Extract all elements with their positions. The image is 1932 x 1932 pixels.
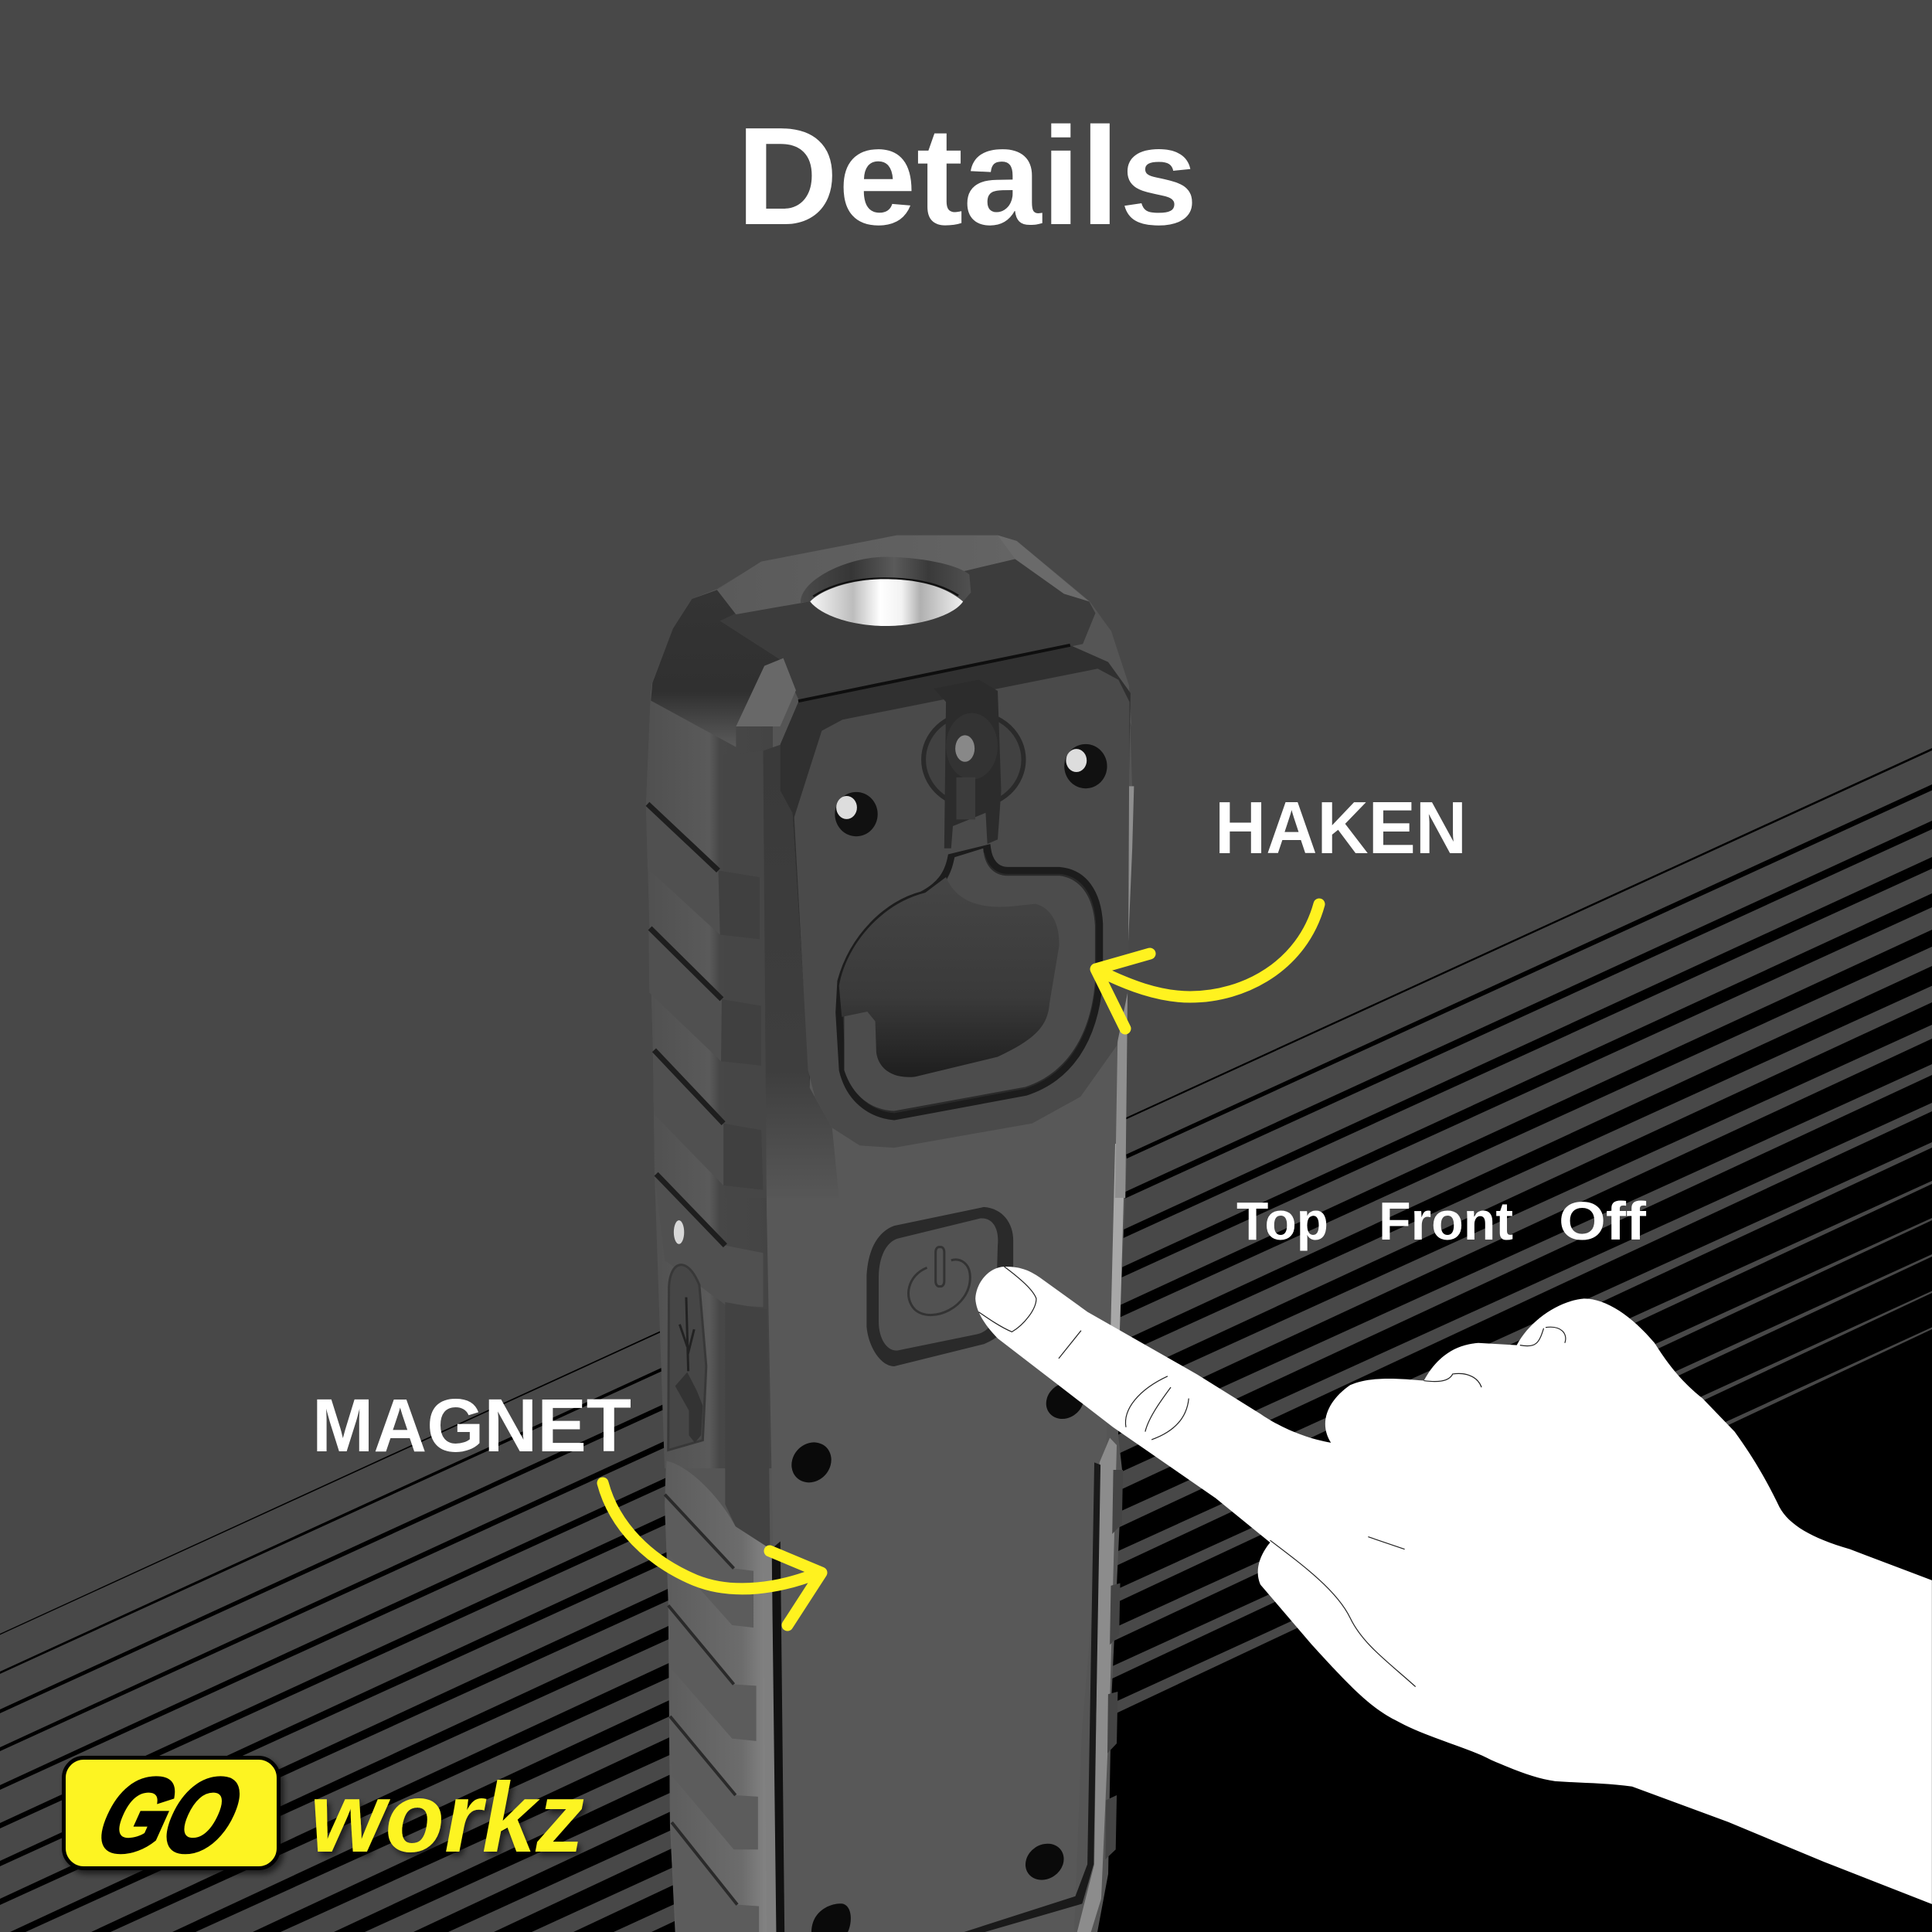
- grip rib 3: [653, 1050, 763, 1190]
- right edge highlight: [1110, 1144, 1125, 1368]
- logo: GO workz: [63, 1757, 584, 1873]
- left groove light edge: [763, 1549, 776, 1932]
- rib face: [648, 928, 761, 1066]
- rib 4 edge: [656, 1174, 725, 1246]
- left dark groove: [772, 1541, 784, 1932]
- lower grip rib 3: [670, 1716, 758, 1849]
- screw left: [835, 792, 878, 836]
- side dark column: [723, 750, 767, 1198]
- rib face: [670, 1716, 758, 1849]
- word: Top: Top: [1236, 1191, 1328, 1251]
- finger crease: [1059, 1331, 1081, 1359]
- hook opening: [839, 877, 1060, 1077]
- button recess: [866, 1207, 1013, 1366]
- lower grip rib 4: [672, 1822, 759, 1932]
- grip rib 1: [646, 804, 760, 939]
- button face: [879, 1218, 998, 1351]
- lower grip rib 1: [665, 1495, 753, 1628]
- knuckle crease 2: [1145, 1387, 1171, 1432]
- side mid column: [725, 1302, 770, 1549]
- right side bump 4: [1105, 1795, 1117, 1859]
- screw glint: [1066, 749, 1087, 772]
- knuckle crease 1: [1125, 1376, 1168, 1427]
- curled finger line 2: [1546, 1327, 1566, 1343]
- grip rib 2: [648, 928, 761, 1066]
- right corner: [1083, 601, 1131, 726]
- rib edge: [650, 928, 722, 999]
- rib front: [718, 870, 760, 939]
- rib face: [668, 1605, 757, 1741]
- rib front: [721, 999, 761, 1066]
- hook outer groove: [839, 849, 1100, 1117]
- USB symbol: [679, 1298, 694, 1371]
- right bevel: [998, 536, 1089, 601]
- rib edge: [665, 1495, 734, 1569]
- lens: [801, 557, 971, 626]
- right side bump 1: [1112, 1470, 1123, 1534]
- hand illustration: [975, 1267, 1932, 1904]
- arrow: HAKEN: [1096, 904, 1319, 1029]
- device body silhouette: [646, 536, 1132, 1932]
- ball: [946, 713, 998, 780]
- top front band: [720, 559, 1096, 701]
- right side bump 3: [1107, 1692, 1117, 1753]
- curled finger line 3: [1423, 1373, 1481, 1387]
- diagonal stripes background: [0, 748, 1932, 1932]
- rib front: [723, 1124, 763, 1190]
- rib edge: [672, 1822, 737, 1905]
- USB trident: [679, 1298, 694, 1371]
- right edge strip: [1115, 786, 1134, 1198]
- screw right: [1064, 744, 1107, 788]
- label: HAKEN: HAKEN: [1215, 787, 1467, 869]
- right dark groove: [963, 1462, 1100, 1932]
- rib edge: [668, 1605, 734, 1684]
- left shoulder: [651, 590, 781, 747]
- logo word workz: workz: [310, 1763, 584, 1873]
- ball stem: [956, 777, 975, 819]
- arrow curve: [603, 1483, 819, 1589]
- screw hole upper left: [789, 1438, 834, 1487]
- arrow head: [1096, 954, 1150, 1029]
- power ring: [908, 1260, 970, 1315]
- lower grip rib 2: [668, 1605, 757, 1741]
- lower left side: [665, 1461, 774, 1932]
- hand contour lines: [978, 1267, 1566, 1687]
- top of the device: [651, 536, 1131, 747]
- logo word GO: GO: [80, 1757, 261, 1873]
- screw hole upper right: [1044, 1379, 1086, 1423]
- power bar: [936, 1247, 944, 1287]
- recess top line: [798, 645, 1070, 701]
- word: Front: Front: [1379, 1191, 1513, 1251]
- screw hole lower right: [1023, 1839, 1066, 1884]
- title: Details: [736, 99, 1198, 254]
- rib edge: [654, 1050, 723, 1124]
- LED indicator: [674, 1220, 684, 1244]
- screw hole: [835, 792, 878, 836]
- rib face: [646, 804, 760, 939]
- lens bezel: [801, 557, 971, 603]
- right panel border light: [1077, 1437, 1117, 1932]
- rear top surface: [717, 536, 1017, 614]
- fingernail: [978, 1267, 1036, 1332]
- lens reflector: [810, 579, 963, 626]
- rib edge: [670, 1716, 736, 1795]
- arrow curve: [1097, 904, 1319, 997]
- USB slider: [675, 1372, 702, 1443]
- rib face: [653, 1050, 763, 1190]
- knuckle crease 3: [1151, 1399, 1189, 1440]
- rib face: [672, 1822, 759, 1932]
- ball pivot: [923, 680, 1024, 849]
- left side face: [646, 693, 773, 1468]
- palm crease: [1368, 1537, 1405, 1549]
- label: Top Front Off: [1236, 1191, 1647, 1251]
- screw glint: [836, 796, 857, 819]
- power button: [866, 1207, 1013, 1366]
- word: Off: Off: [1559, 1191, 1647, 1251]
- upper body detail: [646, 645, 1134, 1198]
- textured bevel: [736, 658, 796, 726]
- ball highlight: [955, 735, 975, 762]
- logo badge: [63, 1757, 278, 1869]
- hook plate: [794, 668, 1130, 1148]
- label: MAGNET: MAGNET: [312, 1383, 631, 1468]
- screw hole: [1064, 744, 1107, 788]
- hand silhouette: [975, 1267, 1932, 1904]
- arrow head: [770, 1551, 821, 1625]
- screw hole lower left: [811, 1903, 851, 1932]
- rib face: [665, 1495, 753, 1628]
- column next to plate: [763, 744, 839, 1198]
- pivot disc: [923, 713, 1024, 806]
- rib 4: [655, 1174, 763, 1307]
- USB panel: [668, 1265, 706, 1450]
- plate recess: [781, 645, 1131, 1088]
- curled finger line 1: [1520, 1328, 1543, 1346]
- right side bump 2: [1110, 1583, 1121, 1645]
- lower body detail: [655, 1174, 1123, 1932]
- thumb line: [1270, 1540, 1416, 1687]
- hook body: [844, 849, 1095, 1111]
- arrow: MAGNET: [603, 1483, 821, 1625]
- power icon: [908, 1247, 970, 1315]
- rib edge: [648, 804, 718, 870]
- flashlight device: [646, 536, 1134, 1932]
- front face: [765, 850, 1128, 1932]
- lens rim: [813, 578, 958, 597]
- pivot slot: [934, 680, 1002, 849]
